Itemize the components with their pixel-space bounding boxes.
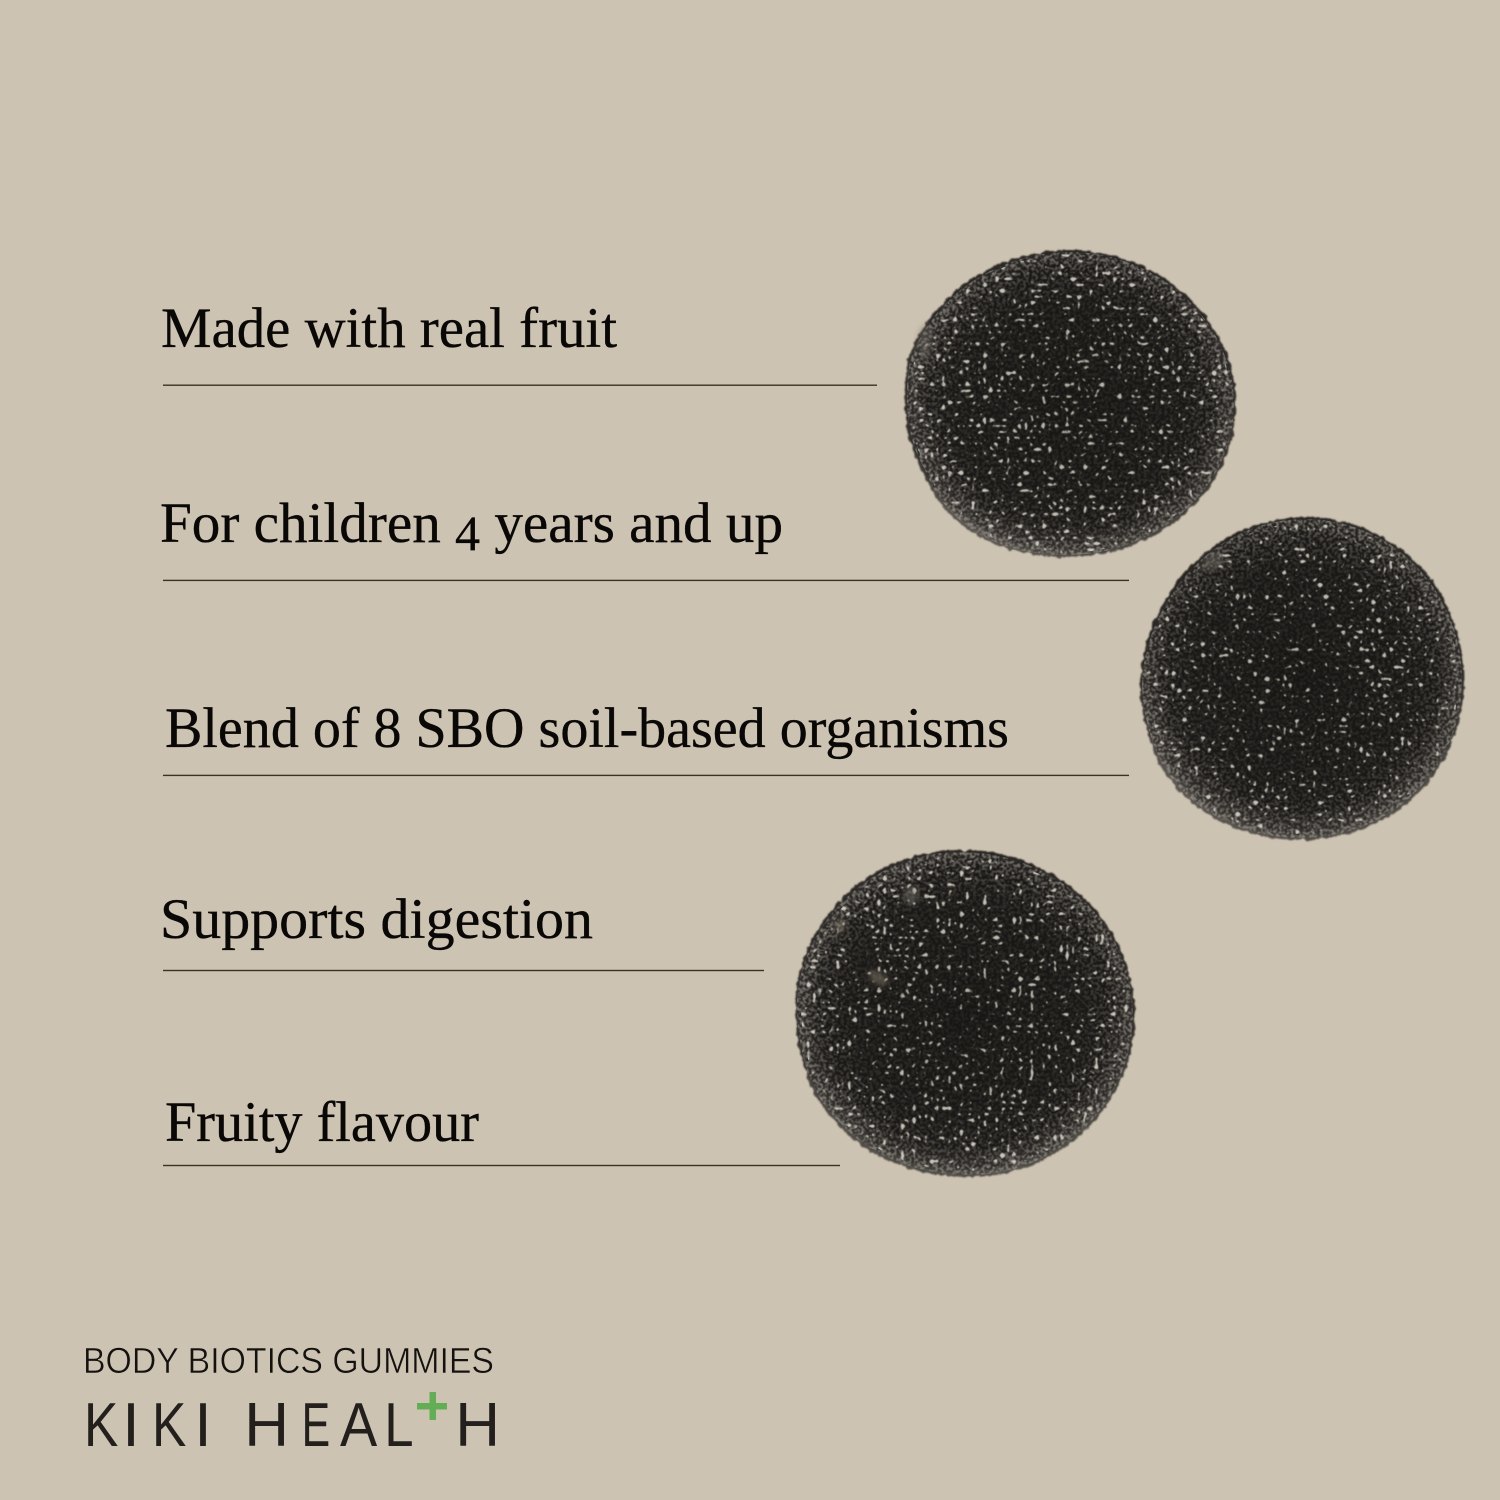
feature: blend of 8 SBO: Blend of 8 SBO soil-based organisms: [165, 697, 1009, 760]
product name: BODY BIOTICS GUMMIES: [83, 1340, 494, 1381]
icon: green plus in logo: [417, 1392, 447, 1420]
gummy: top: [905, 250, 1236, 557]
gummy: lower: [795, 850, 1135, 1177]
brand logo: Kiki Health: E: [302, 1391, 330, 1460]
brand logo: Kiki Health: H: [244, 1391, 289, 1460]
brand logo: Kiki Health: [84, 1391, 500, 1460]
feature: for children 4 years and up: [160, 492, 1129, 581]
brand logo: Kiki Health: L: [384, 1391, 414, 1460]
brand logo: Kiki Health: K: [152, 1391, 186, 1460]
feature: for children 4 years and up: For children: [160, 492, 440, 555]
brand logo: Kiki Health: H: [455, 1391, 500, 1460]
feature: supports digestion: Supports digestion: [160, 888, 593, 951]
brand logo: Kiki Health: I: [122, 1391, 140, 1460]
feature: for children 4 years and up: 4: [455, 505, 480, 561]
brand logo: Kiki Health: K: [84, 1391, 118, 1460]
feature: fruity flavour: Fruity flavour: [165, 1091, 479, 1154]
feature: made with real fruit: Made with real fruit: [161, 297, 617, 360]
brand logo: Kiki Health: I: [194, 1391, 212, 1460]
gummy: right: [1140, 517, 1464, 840]
feature: for children 4 years and up: years and up: [480, 492, 783, 555]
brand logo: Kiki Health: A: [340, 1391, 378, 1460]
